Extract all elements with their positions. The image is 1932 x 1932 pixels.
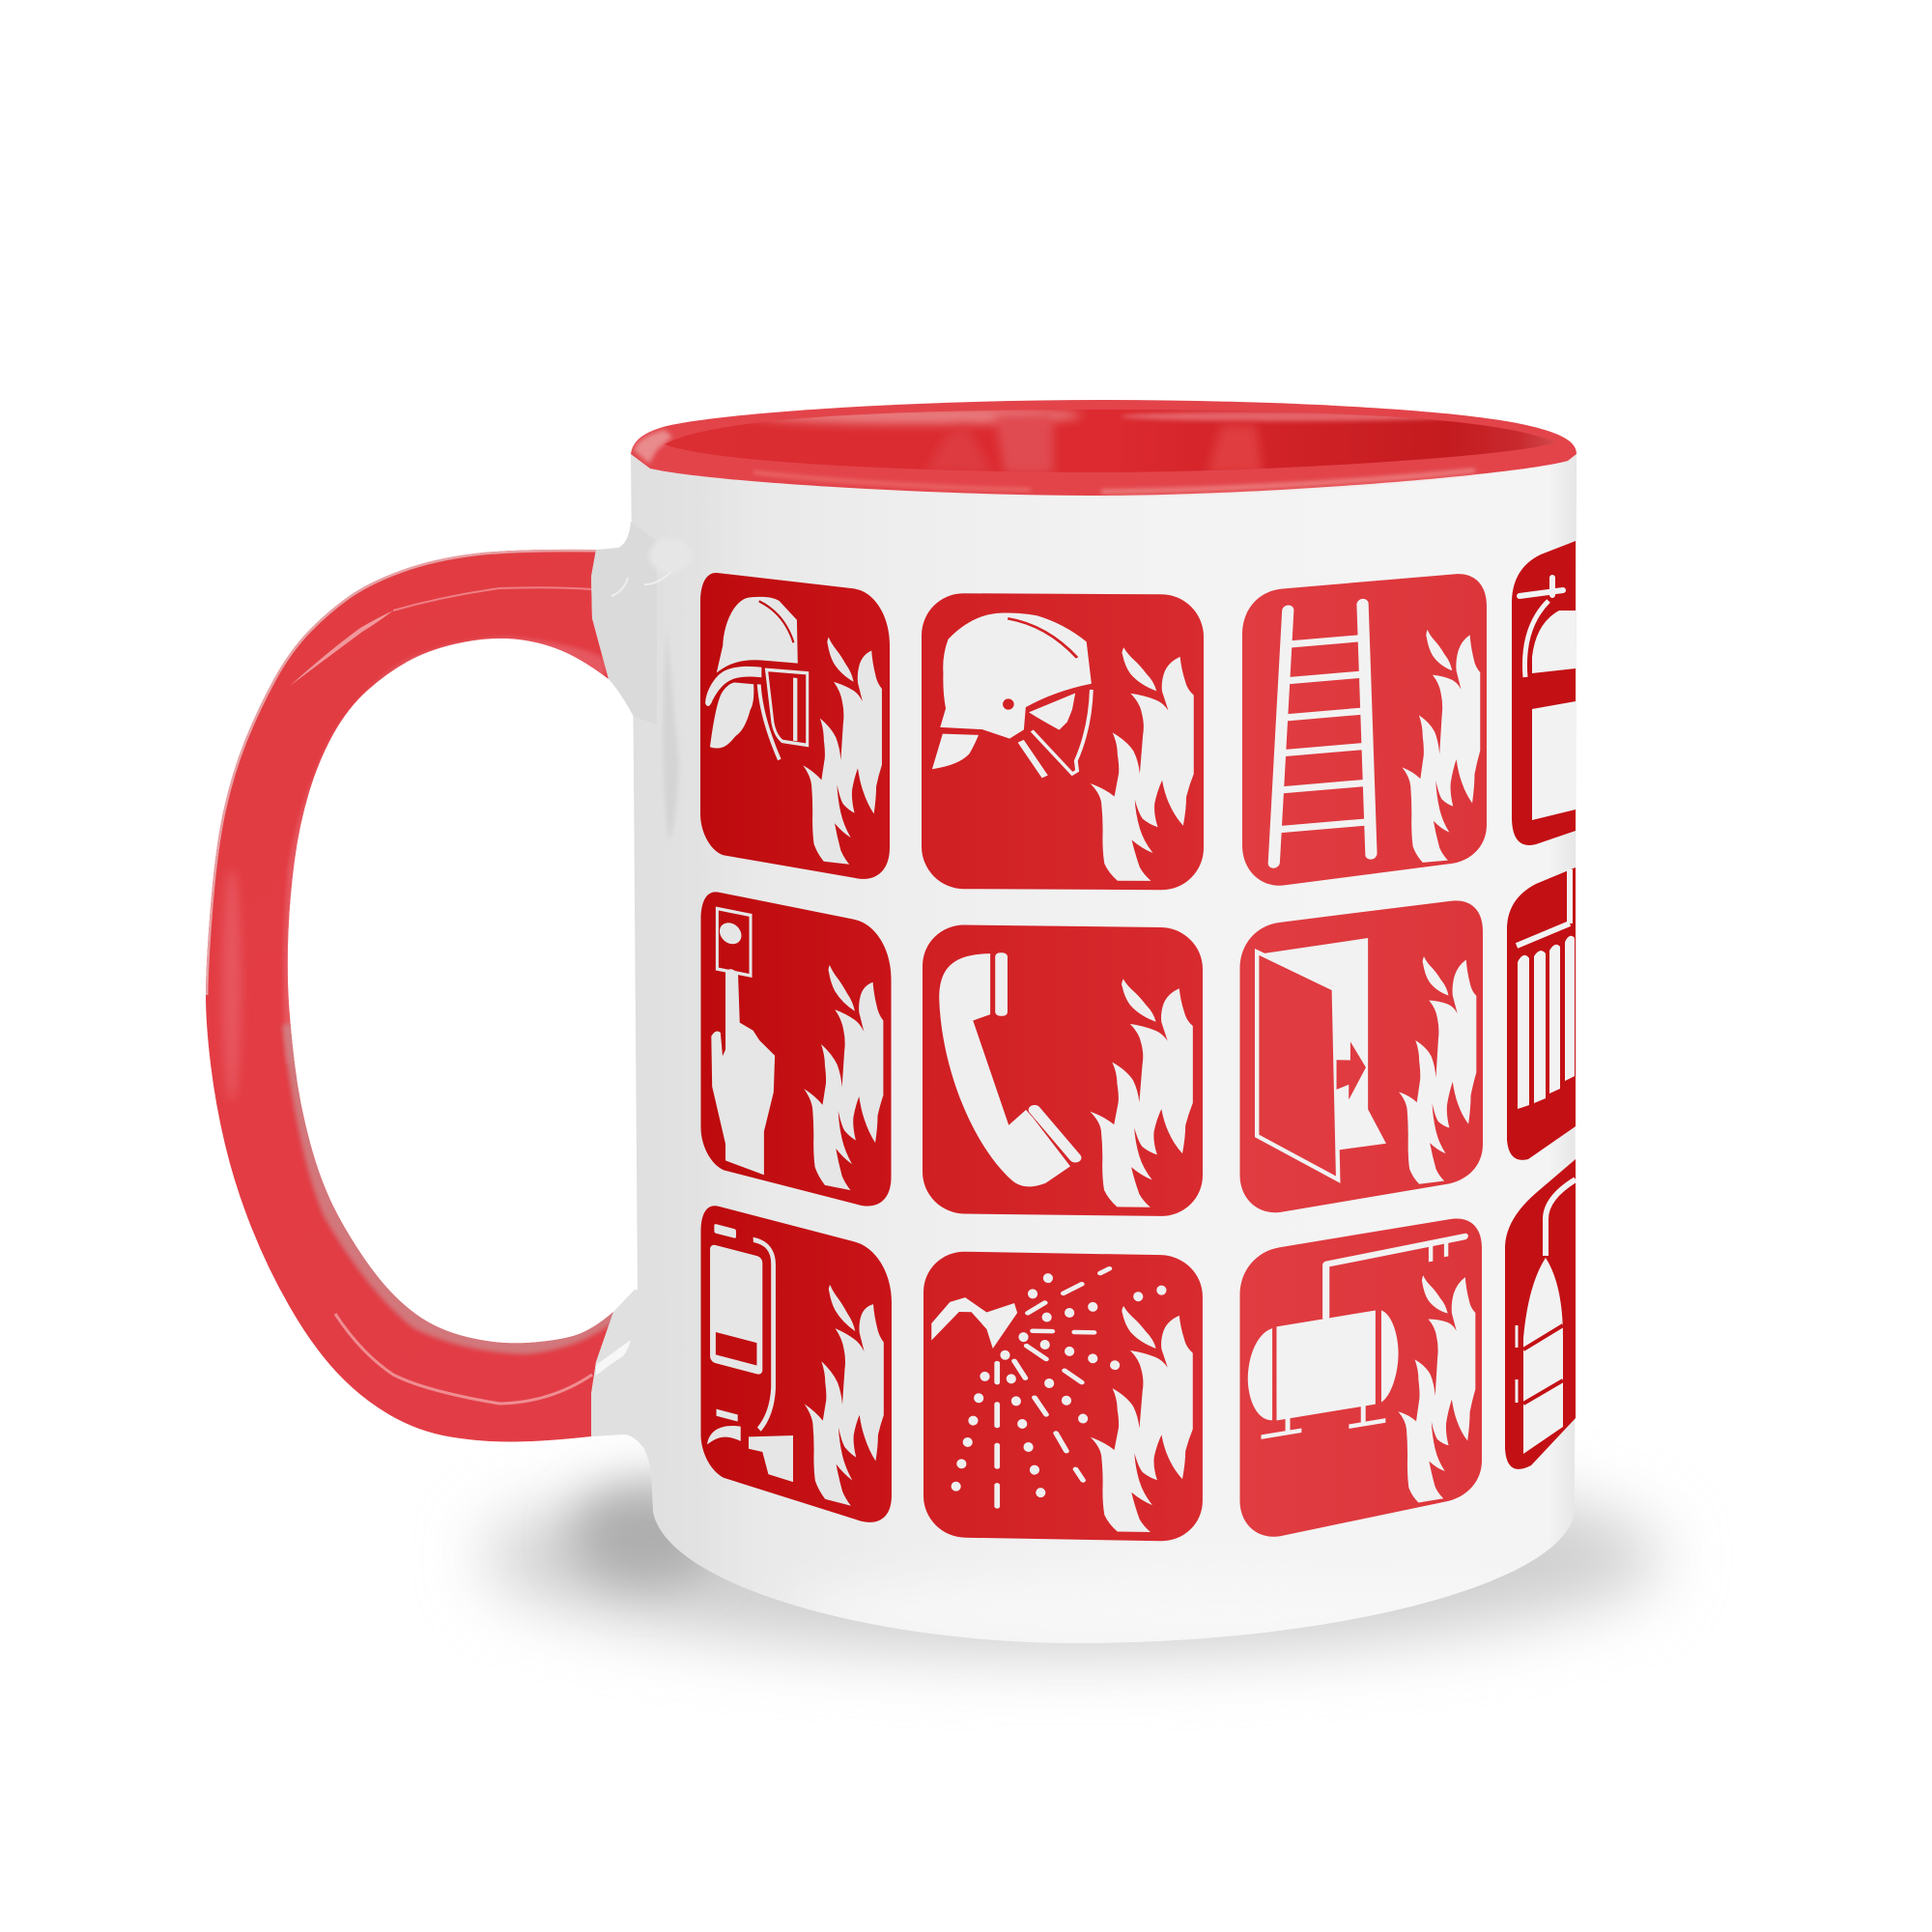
- icon: pressure vessel: [1517, 1179, 1576, 1454]
- icon: ladder: [1274, 604, 1371, 863]
- body lower lighting: [864, 1611, 902, 1615]
- tile: firefighter helmet with visor: [700, 571, 890, 882]
- tile: fire door: [1240, 897, 1483, 1217]
- tile: water spray: [923, 1251, 1203, 1542]
- tile: ladder: [1242, 571, 1487, 889]
- handle attachment: top: [591, 522, 692, 840]
- tile: storage tank: [1240, 1214, 1482, 1543]
- tile: fire extinguisher: [1512, 541, 1576, 845]
- tile: gas tank with pipe: [1505, 1159, 1576, 1469]
- icon: telephone handset: [939, 952, 1075, 1187]
- mug body: [631, 454, 1577, 1643]
- handle attachment: bottom: [591, 1290, 667, 1473]
- icon: open door with arrow: [1257, 936, 1386, 1190]
- tile: firefighter helmet side view: [922, 593, 1204, 890]
- tile: fire hose canister: [701, 1202, 892, 1529]
- tile: manual fire alarm call point: [701, 889, 892, 1211]
- tile: gas cylinder bank: [1507, 867, 1576, 1160]
- icon: spray dashes: [997, 1266, 1109, 1508]
- icon: spray dots: [952, 1271, 1166, 1499]
- mug rim: [631, 400, 1577, 496]
- cast shadow under mug: [483, 1461, 1662, 1654]
- icon: cylinders and manifold: [1517, 869, 1575, 1109]
- icon: helmet: [705, 590, 808, 763]
- tile: emergency telephone: [923, 924, 1203, 1216]
- mug handle: [206, 550, 614, 1442]
- icon: spray nozzle: [931, 1297, 1017, 1349]
- icon: alarm button and hand: [711, 907, 775, 1177]
- icon: tank with sprinkler pipe: [1248, 1236, 1464, 1443]
- icon: canister with hose: [707, 1222, 793, 1482]
- icon: helmet with mask: [932, 612, 1092, 777]
- icon: extinguisher: [1520, 578, 1576, 820]
